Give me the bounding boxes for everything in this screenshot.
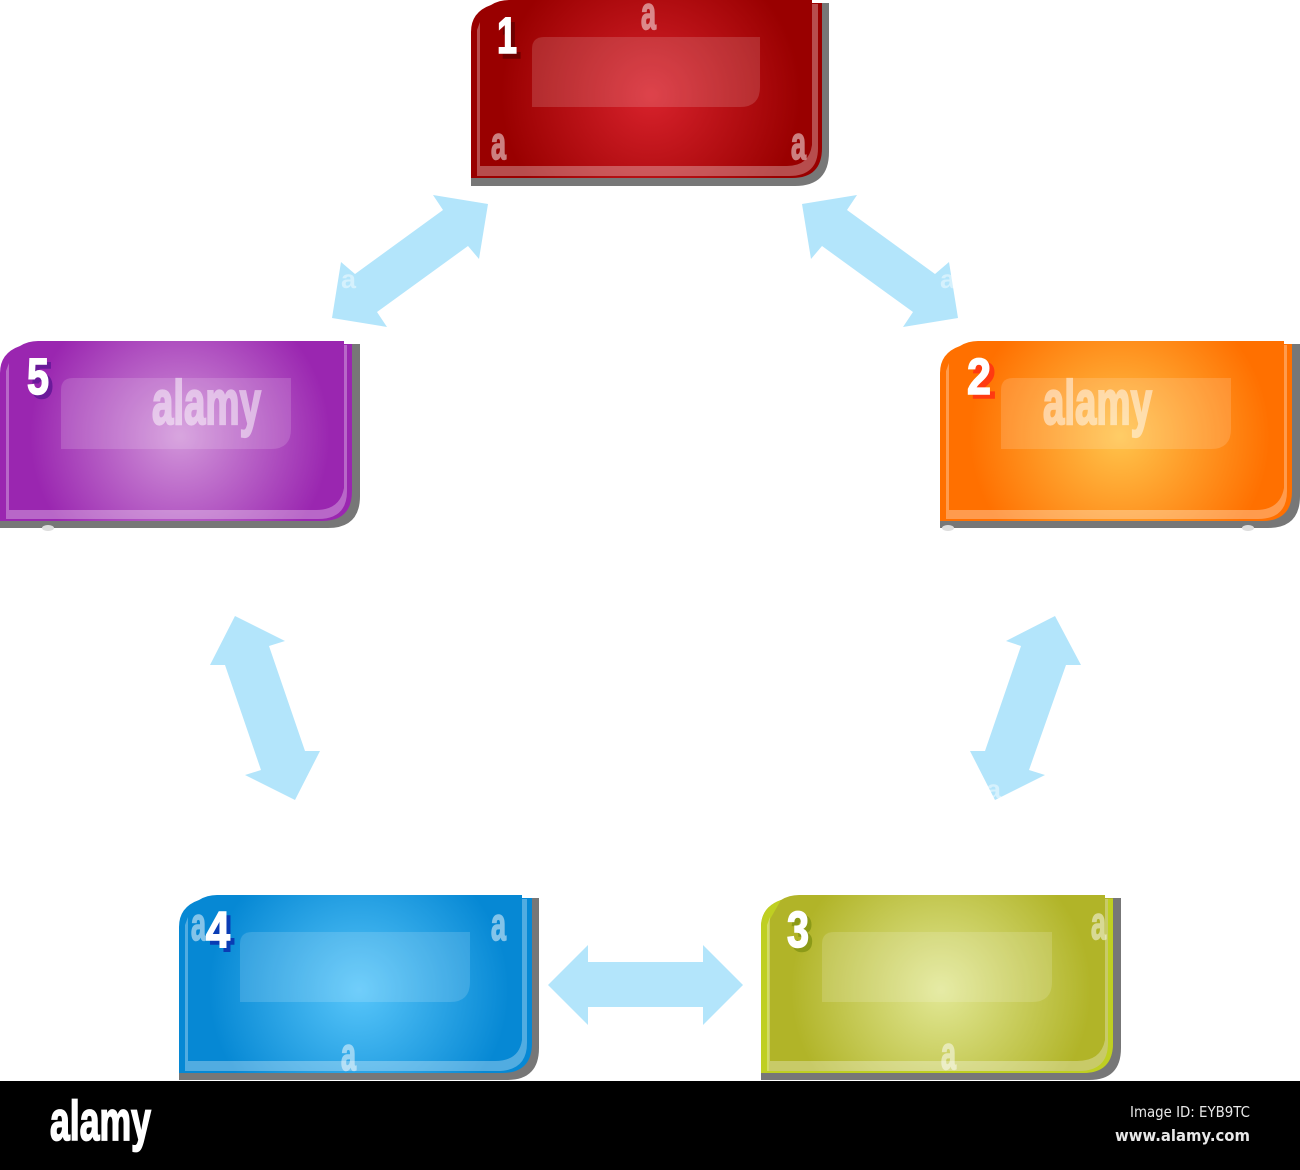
card 3: olive: 3 — [791, 905, 813, 962]
card 4: blue: a — [191, 898, 206, 950]
card 1: red: a — [491, 117, 506, 169]
card 5: purple: 5 — [31, 352, 53, 409]
card 3: olive: 3 — [787, 901, 809, 958]
card 1: red: 1 — [501, 12, 521, 69]
arrow: between 2 and 3 — [970, 616, 1081, 804]
card 2: orange: 2 — [967, 348, 991, 405]
image id: Image ID: EYB9TC — [1130, 1103, 1250, 1121]
arrow: between 4 and 5 — [210, 616, 320, 800]
card 4: blue: a — [491, 898, 506, 950]
card 1: red: a — [791, 117, 806, 169]
card 5: purple: 5 — [27, 348, 49, 405]
card 5: purple: alamy — [152, 369, 261, 438]
arrow: between 5 and 1 — [332, 195, 488, 327]
card 4: blue: a — [341, 1028, 356, 1080]
card 5: purple — [0, 341, 360, 531]
arrow: between 1 and 2: a — [940, 264, 956, 294]
card 2: orange — [940, 341, 1300, 531]
website: www.alamy.com — [1115, 1126, 1250, 1145]
card 4: blue: 4 — [210, 905, 235, 962]
footer logo: alamy — [50, 1089, 151, 1152]
card 1: red: 1 — [497, 7, 517, 64]
card 4: blue: 4 — [206, 901, 231, 958]
card 4: blue — [179, 895, 539, 1080]
card 1: red — [471, 0, 829, 186]
arrow: between 3 and 4 — [548, 945, 743, 1025]
card 3: olive — [761, 895, 1121, 1080]
card 3: olive: a — [1091, 897, 1106, 949]
card 2: orange: alamy — [1043, 369, 1152, 438]
card 2: orange: 2 — [972, 352, 996, 409]
arrow: between 2 and 3: a — [986, 774, 1002, 804]
arrow: between 5 and 1: a — [341, 264, 357, 294]
card 3: olive: a — [941, 1027, 956, 1079]
arrow: between 1 and 2 — [802, 195, 958, 327]
footer bar — [0, 1081, 1300, 1170]
